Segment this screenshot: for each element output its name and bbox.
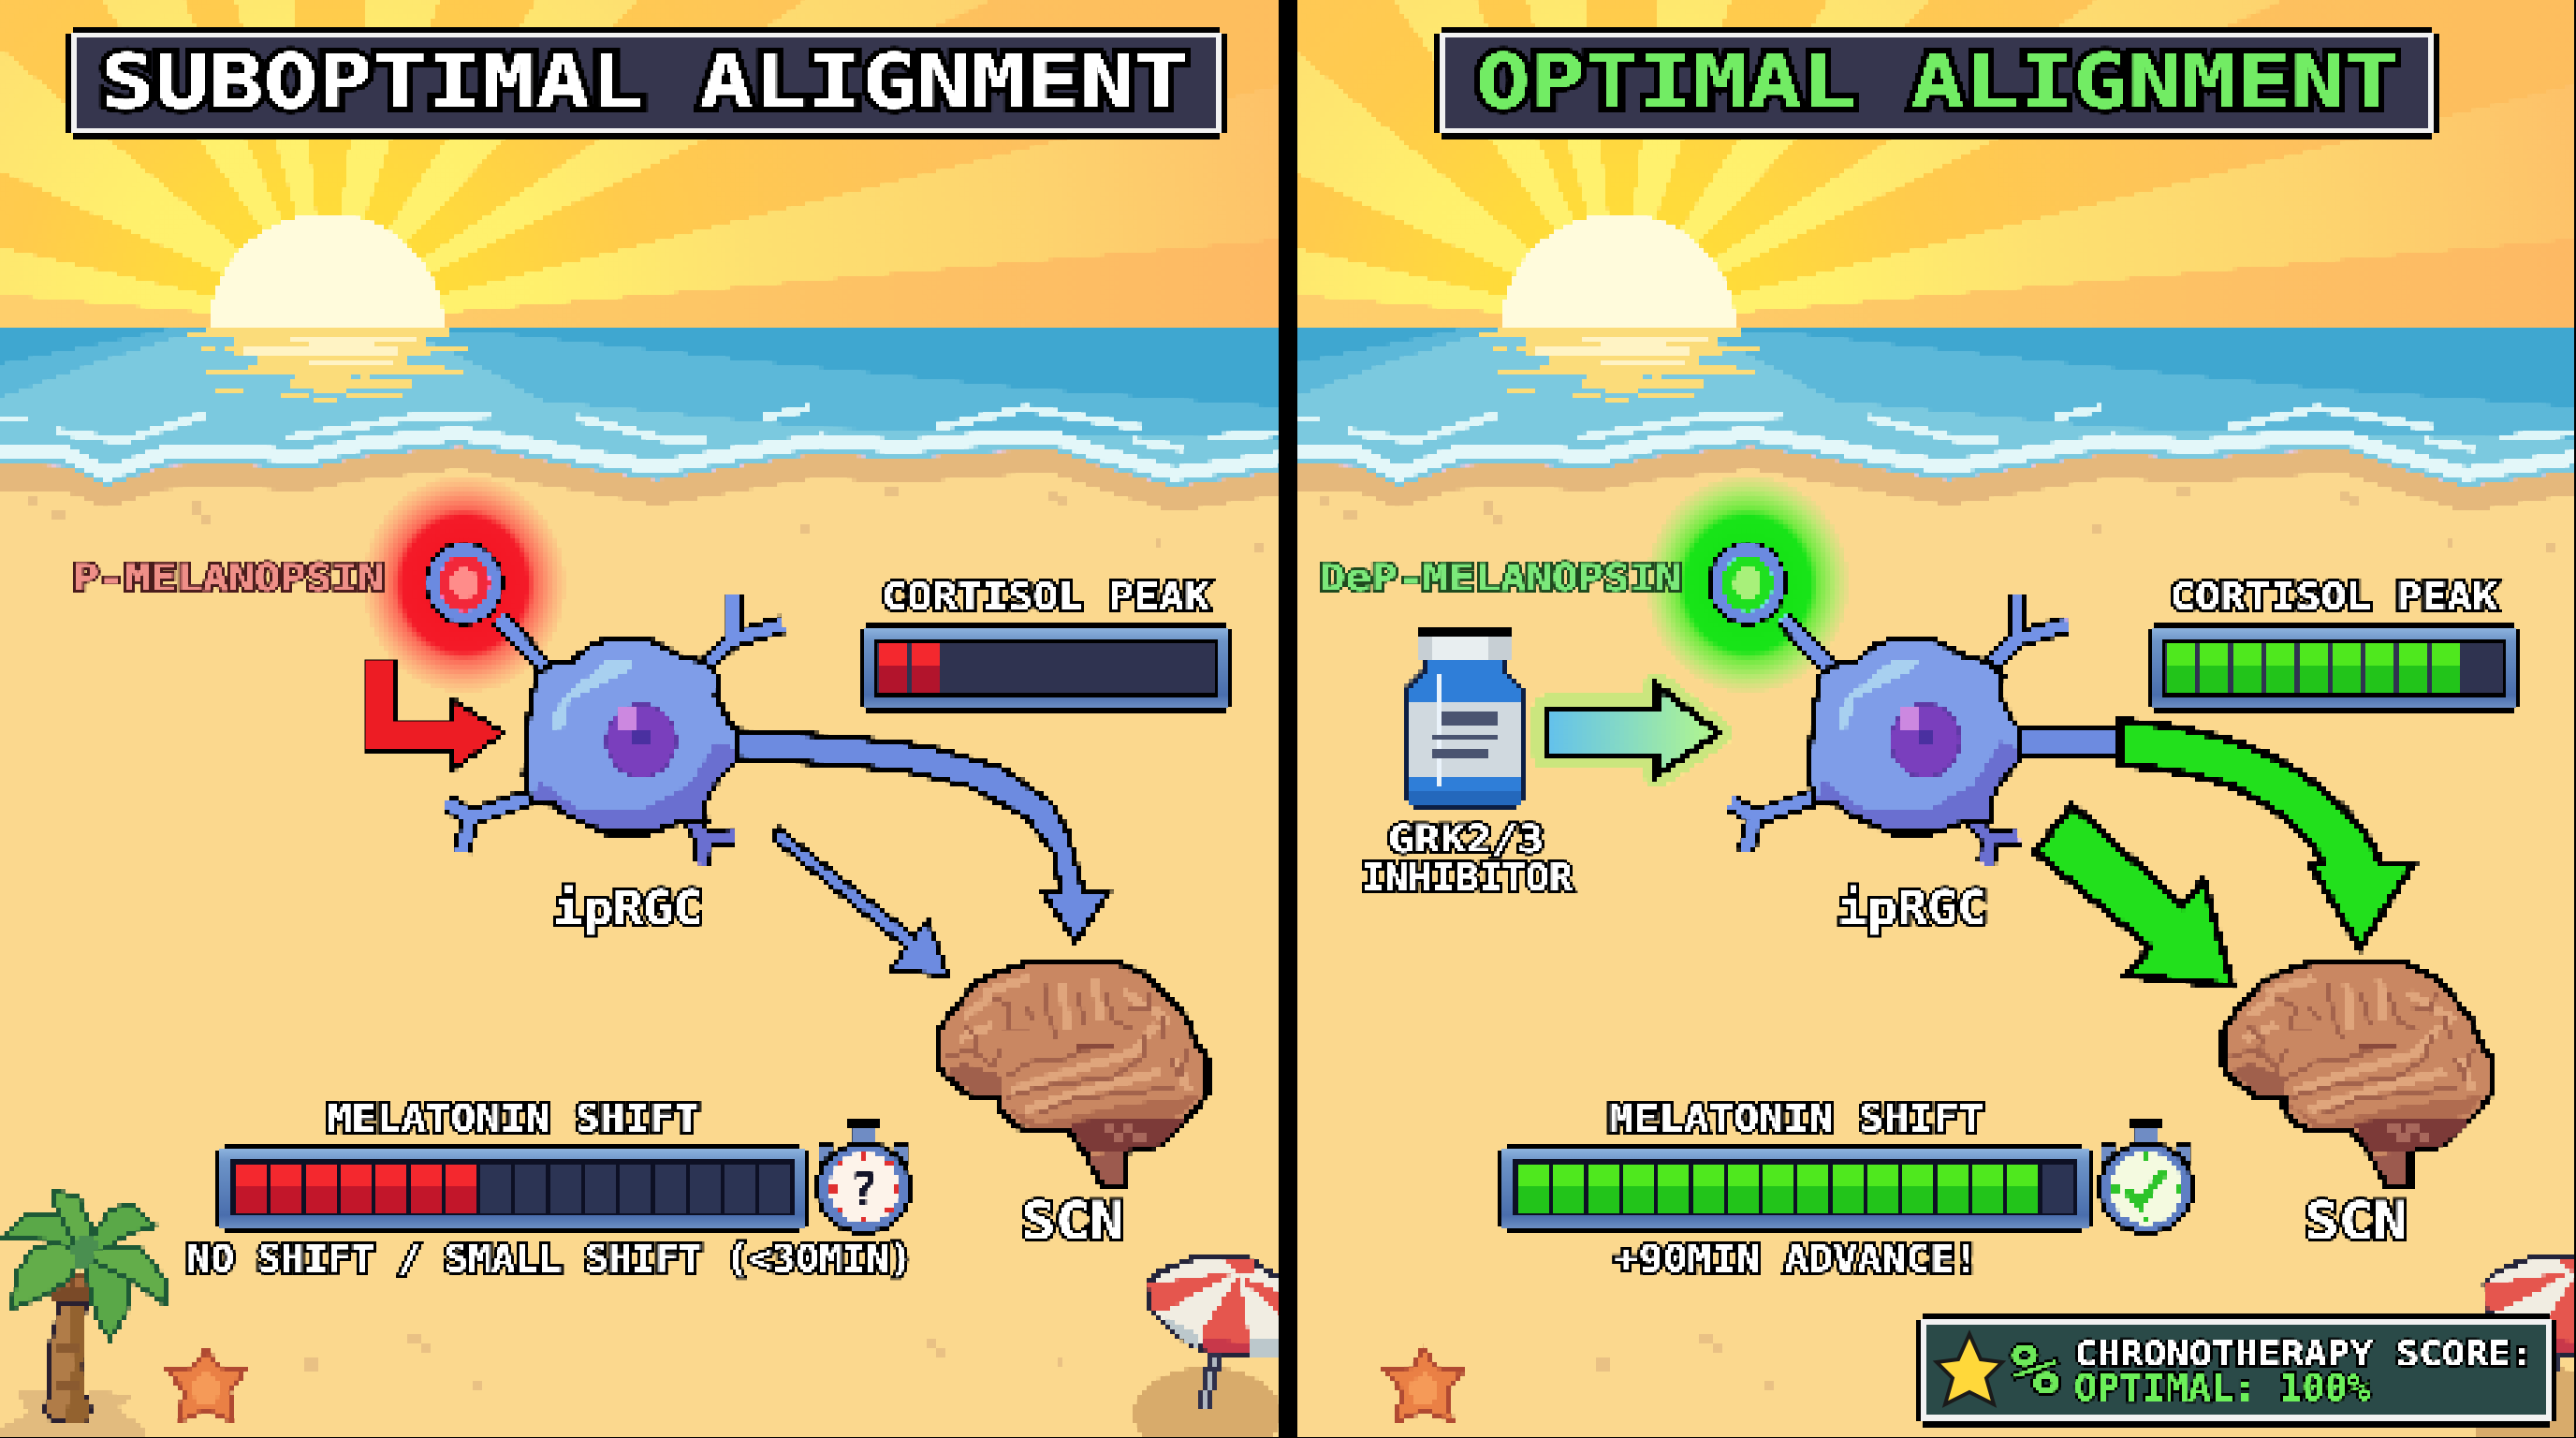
panel: suboptimal alignment: [0, 0, 1279, 1437]
icon: melanopsin receptor ring: [427, 543, 502, 624]
labels: left panel: [73, 557, 1209, 1281]
icon: GRK2/3 inhibitor vial: [1407, 627, 1522, 808]
status bar: cortisol peak: [860, 623, 1232, 713]
callout: chronotherapy score: [1916, 1313, 2556, 1428]
title: suboptimal alignment: [66, 27, 1227, 139]
icon: brain: [2223, 961, 2492, 1186]
icon: starfish: [167, 1348, 246, 1421]
icon: palm tree: [0, 1192, 166, 1438]
label: GRK2/3: GRK2/3: [1388, 818, 1544, 861]
label: cortisol peak: CORTISOL PEAK: [882, 576, 1209, 619]
arrow: thin axon to SCN: [737, 730, 1108, 943]
icon: ipRGC neuron: [1731, 593, 2068, 864]
label: melatonin shift: MELATONIN SHIFT: [1609, 1097, 1983, 1140]
green dephosphorylated glow: [1647, 476, 1849, 693]
divider: [1279, 0, 1297, 1438]
beach background: sky, sun, sea, sand: [0, 0, 1279, 1437]
label: cortisol peak: CORTISOL PEAK: [2170, 576, 2497, 619]
icon: beach umbrella: [2469, 1257, 2576, 1438]
label: P-melanopsin: P-MELANOPSIN: [73, 557, 384, 600]
status bar: cortisol peak: [2148, 623, 2520, 713]
arrow: inhibitor action: [1546, 686, 1719, 774]
icon: gold star: [1937, 1334, 2002, 1404]
arrow: straight green signal: [2035, 805, 2232, 986]
label: SCN: SCN: [1021, 1191, 1124, 1251]
arrow: curved green signal: [2121, 721, 2413, 948]
label: melatonin shift: MELATONIN SHIFT: [327, 1097, 699, 1140]
icon: brain: [939, 961, 1208, 1186]
title: optimal alignment: OPTIMAL ALIGNMENT: [1476, 38, 2399, 125]
score text: [2011, 1328, 2534, 1411]
title: optimal alignment: [1434, 27, 2439, 139]
icon: stopwatch check: [2100, 1117, 2193, 1233]
axon stub: [2018, 728, 2130, 757]
icon: starfish: [1384, 1348, 1464, 1421]
labels: right panel: [1320, 557, 2497, 1281]
label: DeP-melanopsin: DeP-MELANOPSIN: [1320, 557, 1681, 600]
title: suboptimal alignment: SUBOPTIMAL ALIGNMENT: [100, 38, 1189, 125]
score value: OPTIMAL: 100%: [2074, 1367, 2370, 1410]
pixel art scene: left: [0, 0, 1279, 1437]
label: no shift: NO SHIFT / SMALL SHIFT (<30MIN): [187, 1238, 913, 1281]
red phosphorylation glow: [363, 476, 565, 693]
label: ipRGC: ipRGC: [553, 881, 703, 935]
status bar: melatonin shift: [1498, 1144, 2093, 1233]
arrow: red inhibited signal: [365, 660, 504, 770]
arrow: thin signal to SCN: [773, 828, 948, 976]
status bar: melatonin shift: [215, 1144, 809, 1233]
stopwatch question mark: ?: [850, 1162, 878, 1216]
label: SCN: SCN: [2305, 1191, 2408, 1251]
label: ipRGC: ipRGC: [1837, 881, 1987, 935]
icon: ipRGC neuron: [446, 593, 783, 864]
icon: beach umbrella: [1133, 1255, 1279, 1437]
icon: stopwatch: [817, 1117, 911, 1233]
green glow behind arrow: [1546, 686, 1719, 774]
label: inhibitor: INHIBITOR: [1361, 857, 1573, 900]
score heading: CHRONOTHERAPY SCORE:: [2074, 1335, 2534, 1373]
label: advance: +90MIN ADVANCE!: [1615, 1238, 1979, 1281]
icon: melanopsin receptor ring: [1710, 543, 1785, 624]
percent sign: %: [2011, 1328, 2059, 1411]
